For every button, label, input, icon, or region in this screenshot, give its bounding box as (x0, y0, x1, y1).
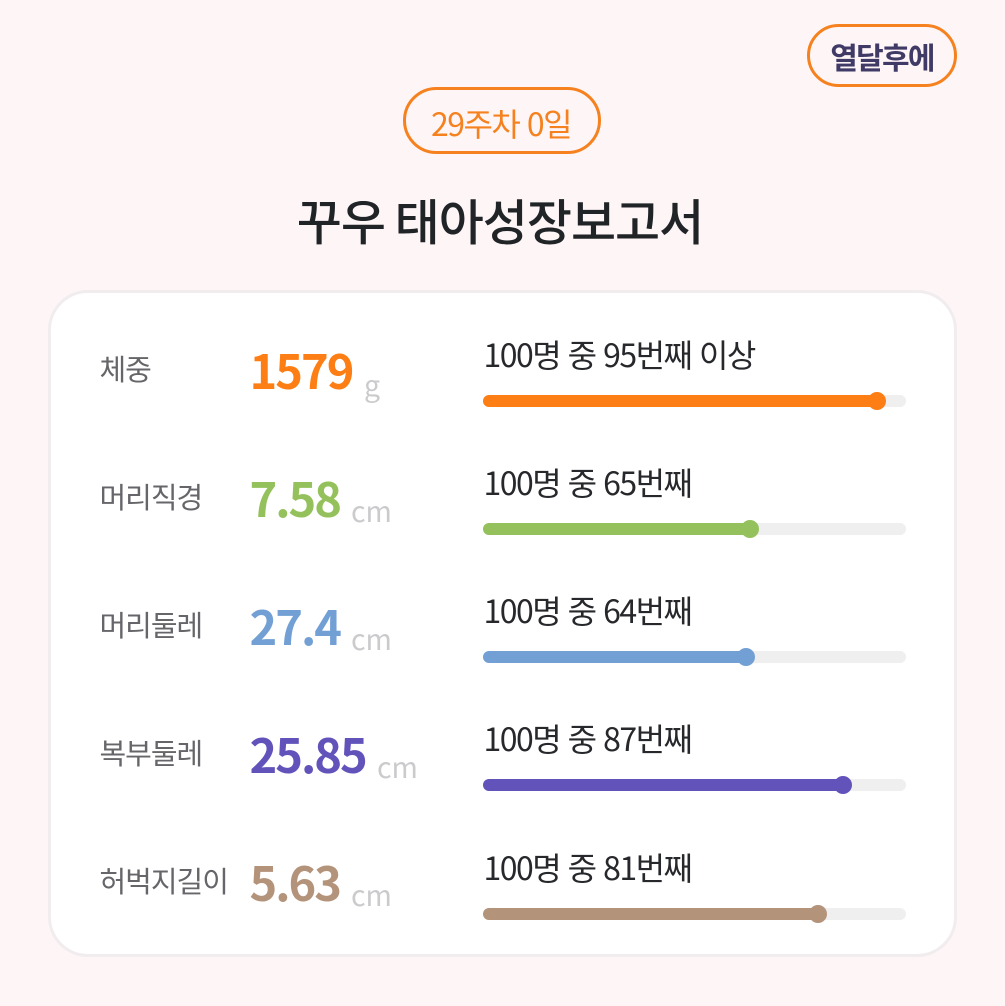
badge: gestational week (403, 87, 601, 154)
progress bar (483, 651, 906, 663)
unit: cm (351, 618, 392, 659)
title: 꾸우 태아성장보고서 (297, 184, 703, 255)
value: 27.4 (250, 590, 340, 659)
panel: growth measurements (48, 290, 957, 957)
label: 머리직경 (100, 475, 202, 517)
progress bar (483, 395, 906, 407)
rank text: 100명 중 65번째 (484, 459, 691, 505)
value: 7.58 (250, 462, 340, 531)
badge: brand: 열달후에 (830, 34, 934, 78)
label: 체중 (100, 347, 151, 389)
value: 5.63 (250, 846, 340, 915)
unit: cm (351, 874, 392, 915)
row: weight (100, 331, 906, 410)
value: 1579 (250, 334, 352, 403)
progress bar (483, 779, 906, 791)
label: 복부둘레 (100, 731, 202, 773)
rank text: 100명 중 81번째 (484, 844, 691, 890)
row: abdominal circumference (100, 715, 906, 794)
badge: gestational week: 29주차 0일 (431, 100, 571, 146)
rank text: 100명 중 95번째 이상 (484, 331, 755, 377)
progress bar (483, 523, 906, 535)
unit: g (364, 364, 380, 405)
row: head circumference (100, 587, 906, 666)
unit: cm (351, 490, 392, 531)
progress bar (483, 908, 906, 920)
label: 머리둘레 (100, 603, 202, 645)
label: 허벅지길이 (100, 859, 228, 901)
badge: brand (807, 24, 957, 87)
row: femur length (100, 844, 906, 923)
value: 25.85 (250, 718, 366, 787)
rank text: 100명 중 64번째 (484, 587, 691, 633)
row: head diameter (100, 459, 906, 538)
unit: cm (377, 746, 418, 787)
rank text: 100명 중 87번째 (484, 715, 691, 761)
